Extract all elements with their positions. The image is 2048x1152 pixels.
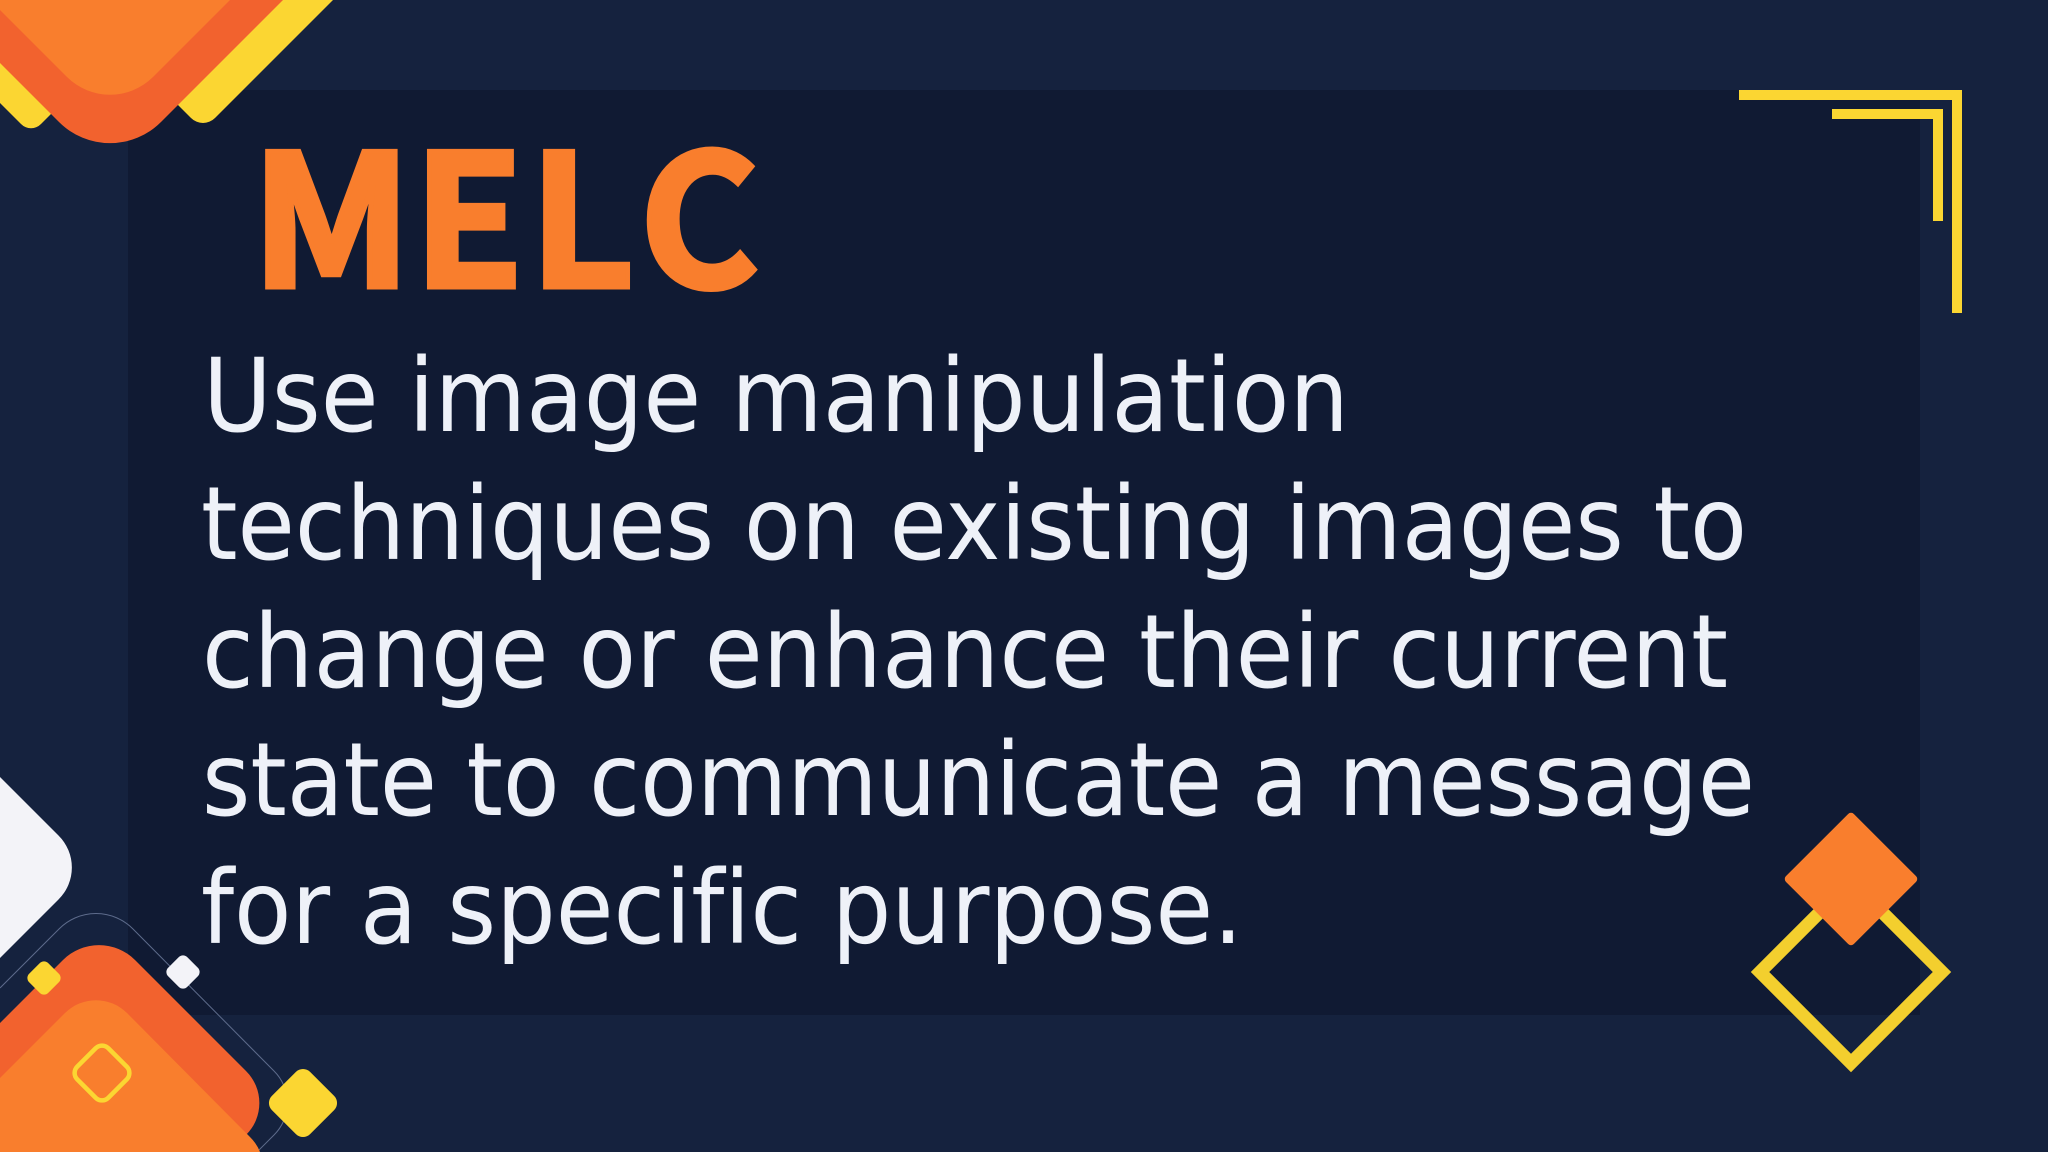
title: L <box>529 75 634 340</box>
body text: state to communicate a message <box>202 721 1755 840</box>
title <box>250 75 759 340</box>
icon: bottom-right diamonds <box>1760 811 1942 1063</box>
body text: change or enhance their current <box>202 593 1728 712</box>
icon: bottom-left diamond cluster <box>0 914 341 1152</box>
content panel <box>128 90 1920 1015</box>
body text: Use image manipulation <box>203 337 1349 456</box>
title: E <box>413 76 524 340</box>
body text: for a specific purpose. <box>201 849 1243 968</box>
title: M <box>250 75 412 340</box>
icon: left white diamond <box>0 777 72 958</box>
body text <box>201 337 1755 968</box>
icon: top-left corner diamonds <box>0 0 333 143</box>
icon: top-right corner bracket <box>1739 90 1962 313</box>
body text: techniques on existing images to <box>201 465 1747 584</box>
title: C <box>639 75 759 340</box>
